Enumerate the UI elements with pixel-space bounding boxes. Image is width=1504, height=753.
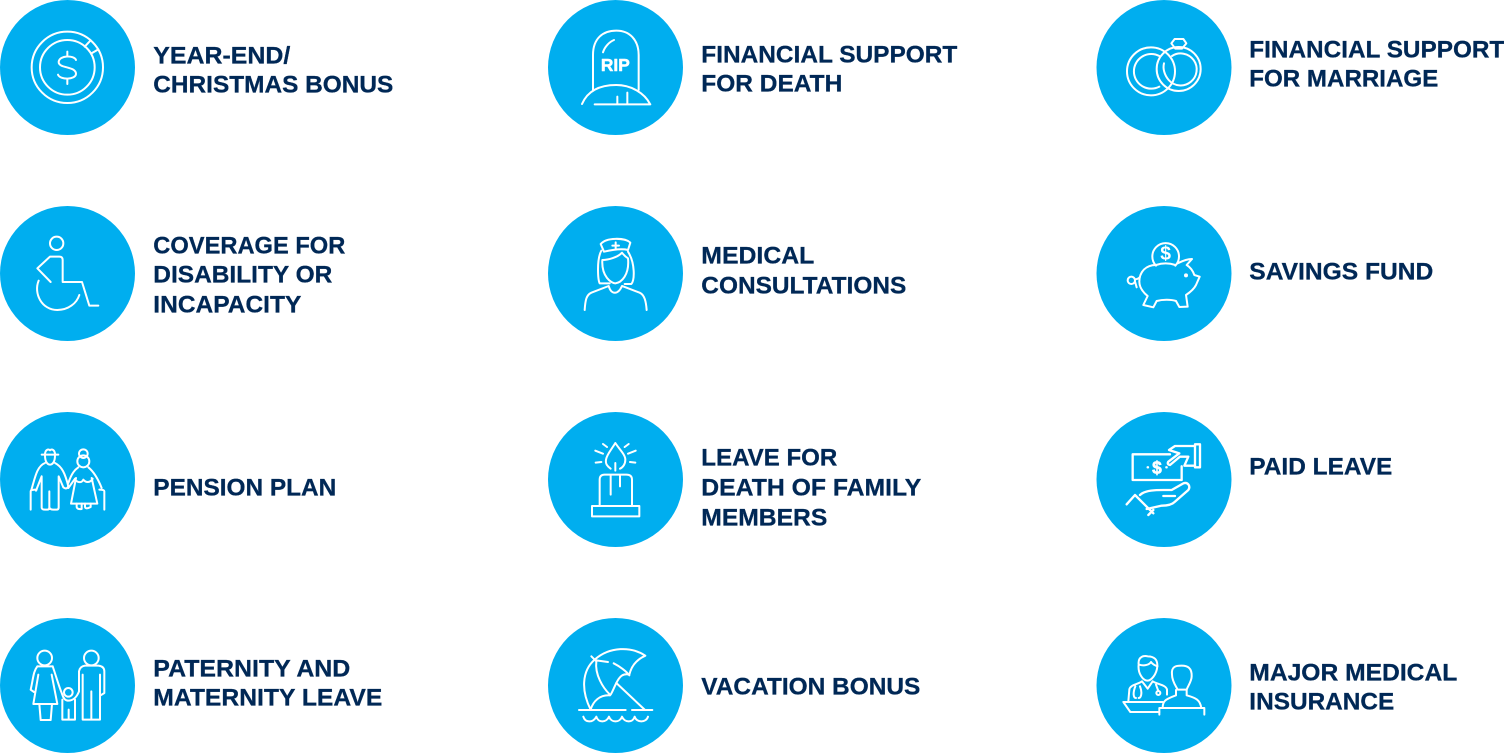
item: financial support for death [548,0,958,135]
item: paid leave [1096,412,1392,547]
item: vacation bonus [548,618,920,753]
item: year-end / christmas bonus [0,0,393,135]
icon: hands exchanging money [1127,444,1200,515]
icon: wheelchair [37,237,98,310]
item: savings fund [1096,206,1433,341]
icon: elderly couple [31,449,104,510]
icon: hands exchanging money: $ [1152,457,1162,477]
icon: gravestone [582,31,650,104]
label: MEMBERS [701,504,827,531]
label: FOR DEATH [701,70,842,97]
label: LEAVE FOR [701,444,837,471]
icon: family holding hands [31,651,104,720]
label: INSURANCE [1249,688,1394,715]
label: VACATION BONUS [701,673,920,700]
icon: gravestone: RIP [601,55,630,75]
label: MEDICAL [701,242,814,269]
icon: wedding rings [1127,39,1201,95]
label: DISABILITY OR [153,261,332,288]
label: CHRISTMAS BONUS [153,71,393,98]
label: SAVINGS FUND [1249,258,1433,285]
label: PAID LEAVE [1249,453,1392,480]
label: FINANCIAL SUPPORT [701,41,958,68]
icon: beach umbrella [579,649,652,721]
label: INCAPACITY [153,291,301,318]
label: FOR MARRIAGE [1249,65,1438,92]
item: medical consultations [548,206,906,341]
label: PENSION PLAN [153,474,336,501]
item: financial support for marriage [1096,0,1504,135]
label: COVERAGE FOR [153,232,345,259]
item: pension plan [0,412,336,547]
item: paternity and maternity leave [0,618,382,753]
label: DEATH OF FAMILY [701,474,921,501]
label: CONSULTATIONS [701,272,906,299]
icon: doctor and patient [1123,656,1204,715]
item: major medical insurance [1096,618,1457,753]
label: YEAR-END/ [153,42,291,69]
label: MAJOR MEDICAL [1249,659,1457,686]
icon: nurse [585,239,647,310]
icon: candle [592,443,639,516]
item: leave for death of family members [548,412,921,547]
label: MATERNITY LEAVE [153,684,382,711]
label: PATERNITY AND [153,655,350,682]
icon: coin with dollar sign [32,32,103,103]
icon: piggy bank [1128,243,1200,307]
label: FINANCIAL SUPPORT [1249,36,1504,63]
icon: piggy bank: $ [1160,243,1171,264]
item: coverage for disability [0,206,345,341]
